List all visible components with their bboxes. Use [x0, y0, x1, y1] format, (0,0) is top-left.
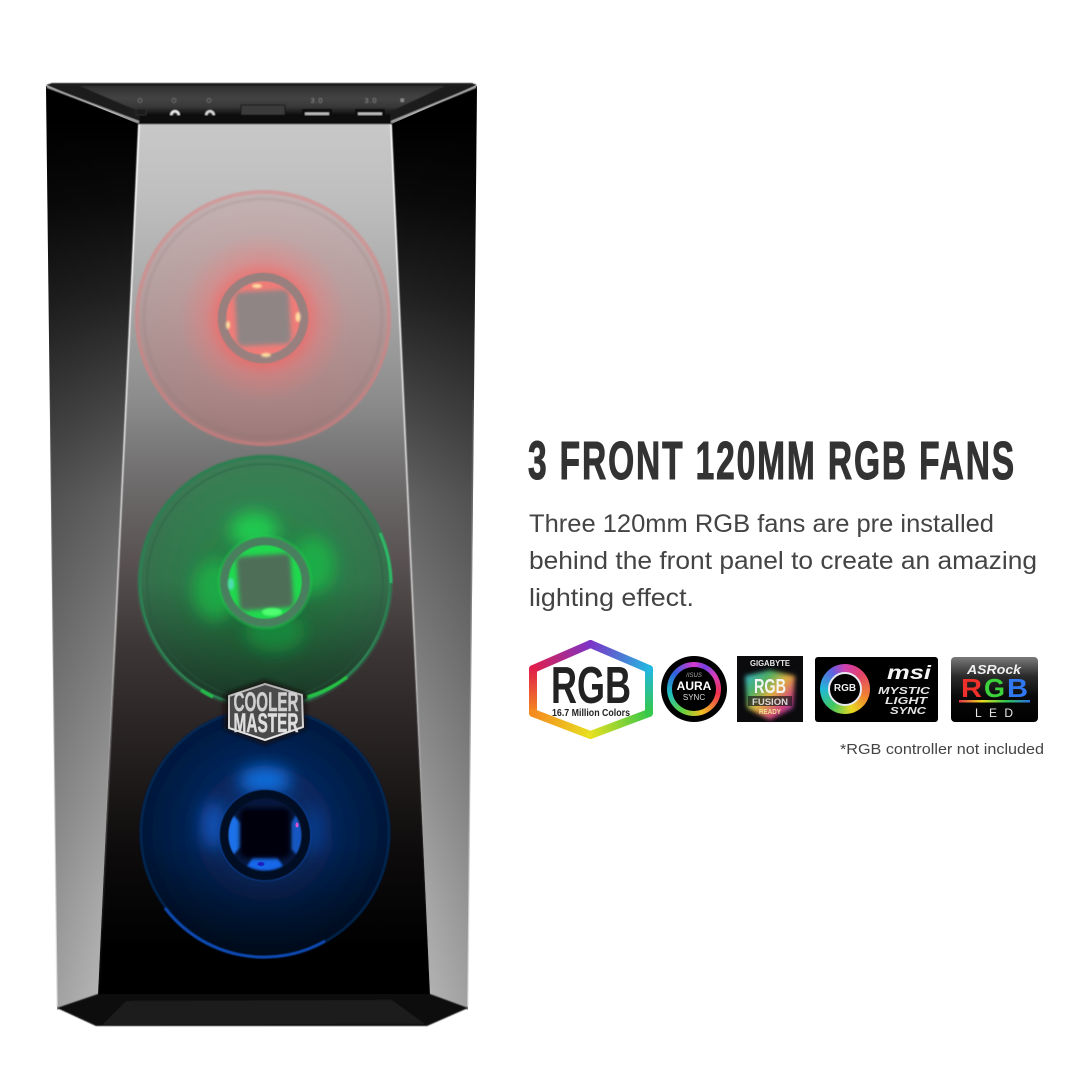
msi rgb ring: [820, 664, 870, 714]
description text: lighting effect.: [529, 584, 694, 612]
red rim: [137, 192, 389, 444]
usb 3.0 ports: 3.0: [365, 98, 377, 105]
badge: msi mystic light sync: msi: [887, 663, 932, 684]
top IO panel: [46, 83, 477, 124]
badge: msi mystic light sync: [815, 657, 938, 722]
aura inner disc: [672, 667, 716, 711]
aura inner disc: /ISUS: [686, 673, 702, 679]
badge: asrock rgb led: R: [961, 673, 982, 703]
badge: gigabyte rgb fusion: [737, 656, 803, 722]
badge: RGB 16.7 million colors: [533, 644, 649, 735]
badge: RGB 16.7 million colors: RGB: [551, 657, 631, 715]
glass panel edges: [99, 124, 430, 985]
blue glow: [201, 766, 324, 854]
right side panel: [391, 86, 477, 1010]
badge: asrock rgb led: [951, 657, 1038, 722]
description text: [529, 510, 1037, 612]
msi inner disc: [828, 672, 862, 706]
green fan: [138, 455, 392, 709]
aura rainbow ring: [667, 662, 721, 716]
badge: asus aura sync: [661, 656, 727, 722]
badge: asrock rgb led: ASRock: [966, 662, 1022, 677]
badge: asrock rgb led: G: [984, 673, 1005, 703]
green hub: [219, 536, 311, 628]
bottom base: [57, 994, 468, 1026]
cooler master logo badge: COOLER: [234, 687, 298, 717]
badge: msi mystic light sync: SYNC: [890, 706, 927, 717]
badge: msi mystic light sync: MYSTIC: [878, 686, 931, 697]
red fan: [135, 190, 391, 446]
badge: asrock rgb led: B: [1007, 673, 1028, 703]
tempered glass front panel: [98, 124, 430, 995]
badge: gigabyte rgb fusion: GIGABYTE: [750, 659, 791, 668]
cooler master logo badge: MASTER: [234, 708, 298, 738]
reset panel: [241, 105, 285, 115]
badge: asrock rgb led: LED: [975, 706, 1013, 720]
aura inner disc: SYNC: [683, 693, 705, 702]
badge: gigabyte rgb fusion: READY: [759, 709, 781, 716]
badge: msi mystic light sync: LIGHT: [885, 696, 928, 707]
badge: gigabyte rgb fusion: FUSION: [752, 697, 788, 707]
aura inner disc: AURA: [677, 679, 711, 693]
blue fan: [140, 708, 390, 958]
description text: behind the front panel to create an amazing: [529, 547, 1037, 575]
usb 3.0 ports: [302, 98, 385, 115]
badge: gigabyte rgb fusion: RGB: [754, 676, 786, 698]
blue rim: [141, 709, 389, 957]
cooler master logo badge: [224, 680, 306, 745]
description text: Three 120mm RGB fans are pre installed: [529, 510, 994, 538]
left side panel: [46, 86, 139, 1010]
io icons: [138, 98, 404, 102]
audio jacks: [136, 109, 215, 115]
footnote: *RGB controller not included: [840, 741, 1044, 758]
green glow lobes: [193, 512, 335, 652]
usb 3.0 ports: 3.0: [311, 98, 323, 105]
blue hub: [219, 789, 311, 881]
badge: RGB 16.7 million colors: 16.7 Million Colors: [552, 708, 630, 719]
red hub: [222, 277, 304, 359]
green rim: [140, 457, 391, 707]
red glow: [179, 234, 347, 402]
msi inner disc: RGB: [834, 683, 856, 694]
